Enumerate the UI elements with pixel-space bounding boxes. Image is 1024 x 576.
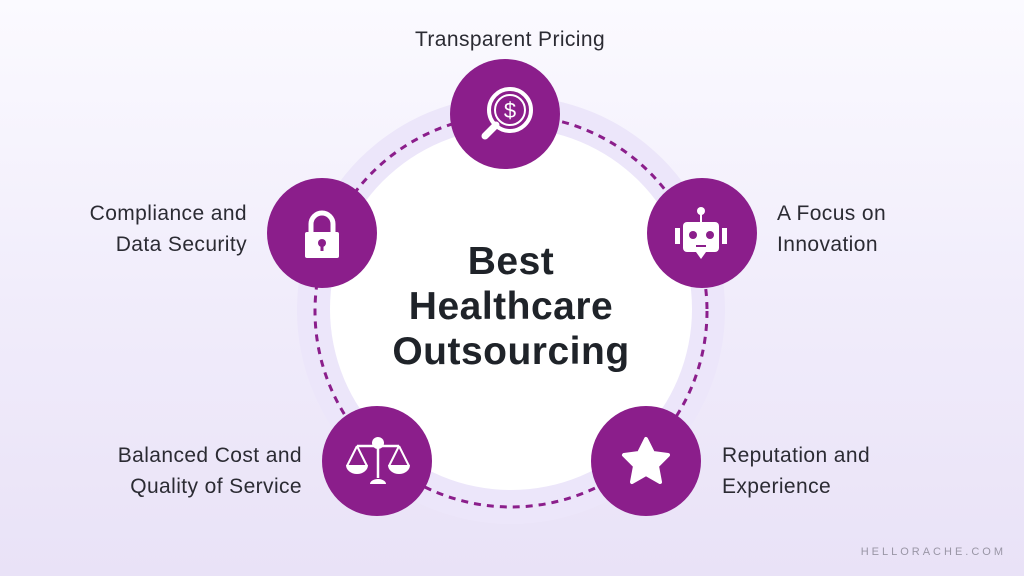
white center circle	[330, 128, 692, 490]
label: innovation: Innovation	[777, 233, 878, 256]
label: balanced cost: Quality of Service	[130, 475, 302, 498]
label: reputation: Reputation and	[722, 444, 870, 467]
label: transparent pricing: Transparent Pricing	[415, 28, 605, 51]
title: Best	[468, 240, 554, 283]
icon: scales	[322, 406, 432, 516]
icon: lock	[267, 178, 377, 288]
label: innovation	[777, 202, 886, 256]
label: compliance: Data Security	[116, 233, 247, 256]
title	[392, 240, 630, 373]
icon: star	[591, 406, 701, 516]
label: balanced cost	[118, 444, 302, 498]
label: balanced cost: Balanced Cost and	[118, 444, 302, 467]
footer: site: HELLORACHE.COM	[861, 546, 1006, 558]
dashed orbit	[315, 115, 707, 507]
title: Outsourcing	[392, 330, 630, 373]
title: Healthcare	[409, 285, 613, 328]
label: compliance: Compliance and	[90, 202, 247, 225]
label: compliance	[90, 202, 247, 256]
label: reputation: Experience	[722, 475, 831, 498]
icon: transparent pricing	[450, 59, 560, 169]
icon: transparent pricing: $	[504, 98, 516, 123]
icon: robot	[647, 178, 757, 288]
label: reputation	[722, 444, 870, 498]
label: innovation: A Focus on	[777, 202, 886, 225]
lavender ring	[297, 96, 725, 524]
